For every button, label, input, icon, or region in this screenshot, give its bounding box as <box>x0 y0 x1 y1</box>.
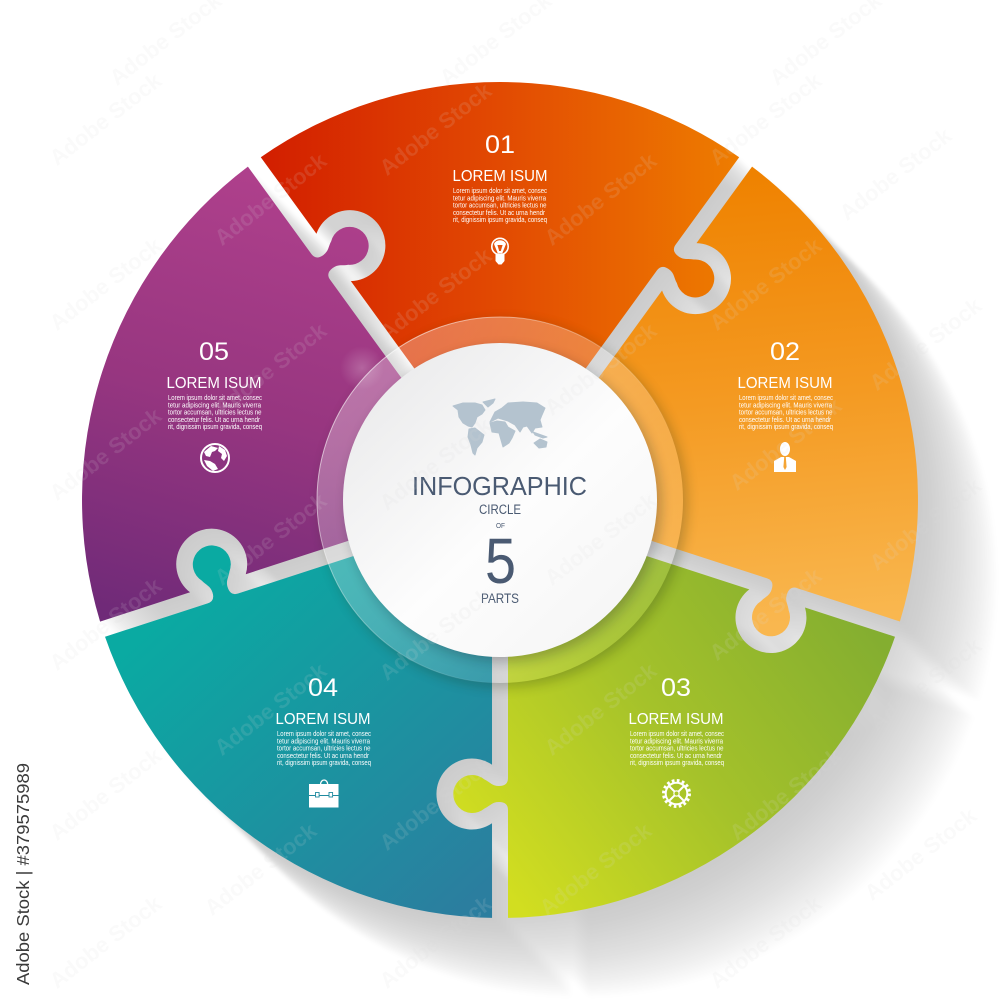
section 04 text <box>276 674 371 767</box>
section 05 text: LOREM ISUM <box>166 375 262 392</box>
section 05 text: 05 <box>199 338 229 366</box>
watermark: Adobe Stock <box>210 657 332 760</box>
section 04 text: tortor accumsan, ultricies lectus ne <box>277 744 370 753</box>
puzzle piece 04 teal <box>105 539 492 918</box>
centre subtitle circle: CIRCLE <box>479 502 521 517</box>
watermark: Adobe Stock <box>725 392 847 495</box>
watermark: Adobe Stock <box>210 147 332 250</box>
watermark: Adobe Stock <box>375 752 497 855</box>
section 01 text: tortor accumsan, ultricies lectus ne <box>453 201 546 210</box>
watermark: Adobe Stock <box>45 572 167 675</box>
section 01 text <box>452 131 548 224</box>
watermark: Adobe Stock <box>540 147 662 250</box>
watermark: Adobe Stock <box>210 487 332 590</box>
watermark: Adobe Stock <box>865 292 987 395</box>
section 01 text: 01 <box>485 131 515 159</box>
watermark: Adobe Stock <box>540 317 662 420</box>
section 03 text: rit, dignissim ipsum gravida, conseq <box>630 758 724 767</box>
centre number 5: 5 <box>485 525 516 597</box>
section 03 text: 03 <box>661 674 691 702</box>
watermark: Adobe Stock <box>45 67 167 170</box>
watermark: Adobe Stock <box>725 742 847 845</box>
watermark: Adobe Stock <box>860 802 982 905</box>
section 03 text: tortor accumsan, ultricies lectus ne <box>630 744 724 753</box>
section 02 text: LOREM ISUM <box>738 375 832 392</box>
watermark: Adobe Stock <box>705 232 827 335</box>
section 02 text: rit, dignissim ipsum gravida, conseq <box>739 422 833 431</box>
stock id vertical text: Adobe Stock | #379575989 <box>13 763 33 985</box>
puzzle piece 02 orange <box>565 167 918 636</box>
watermark: Adobe Stock <box>865 632 987 735</box>
section 05 text <box>166 338 262 431</box>
watermark: Adobe Stock <box>375 412 497 515</box>
section 03 text <box>628 674 724 767</box>
watermark: Adobe Stock <box>535 817 657 920</box>
glass ring shadow <box>321 321 687 687</box>
section 02 text: tortor accumsan, ultricies lectus ne <box>739 408 832 417</box>
puzzle piece 03 green <box>453 538 895 918</box>
watermark: Adobe Stock <box>45 742 167 845</box>
watermark: Adobe Stock <box>210 317 332 420</box>
watermark: Adobe Stock <box>835 122 957 225</box>
section 05 text: Lorem ipsum dolor sit amet, consec <box>168 393 262 402</box>
watermark: Adobe Stock <box>705 67 827 170</box>
centre circle shadow <box>347 348 661 662</box>
section 01 text: Lorem ipsum dolor sit amet, consec <box>453 186 547 195</box>
section 02 text: 02 <box>770 338 800 366</box>
centre of: OF <box>496 523 505 530</box>
section 03 text: tetur adipiscing elit. Mauris viverra <box>630 736 723 745</box>
section 01 text: consectetur felis. Ut ac urna hendr <box>453 208 546 217</box>
section 02 text: Lorem ipsum dolor sit amet, consec <box>739 393 833 402</box>
section 01 text: tetur adipiscing elit. Mauris viverra <box>453 193 546 202</box>
centre title: INFOGRAPHIC <box>412 471 587 501</box>
puzzle piece 05 purple <box>82 167 435 622</box>
section 04 text: tetur adipiscing elit. Mauris viverra <box>277 736 370 745</box>
section 04 text: consectetur felis. Ut ac urna hendr <box>277 751 370 760</box>
section 05 text: consectetur felis. Ut ac urna hendr <box>168 415 261 424</box>
watermark: Adobe Stock <box>45 232 167 335</box>
section 01 text: LOREM ISUM <box>452 168 548 185</box>
section 02 text <box>738 338 833 431</box>
section 04 text: 04 <box>308 674 338 702</box>
watermark: Adobe Stock <box>375 582 497 685</box>
section 04 text: Lorem ipsum dolor sit amet, consec <box>277 729 371 738</box>
watermark: Adobe Stock <box>375 890 497 993</box>
centre circle <box>343 343 657 657</box>
section 03 text: LOREM ISUM <box>628 711 724 728</box>
icon: globe <box>201 444 229 472</box>
section 02 text: consectetur felis. Ut ac urna hendr <box>739 415 832 424</box>
icon: businessman <box>774 442 796 472</box>
section 05 text: tortor accumsan, ultricies lectus ne <box>168 408 262 417</box>
ring sparkle <box>340 346 384 390</box>
watermark: Adobe Stock <box>865 472 987 575</box>
watermark: Adobe Stock <box>375 77 497 180</box>
section 04 text: rit, dignissim ipsum gravida, conseq <box>277 758 371 767</box>
section 02 text: tetur adipiscing elit. Mauris viverra <box>739 400 832 409</box>
section 04 text: LOREM ISUM <box>276 711 370 728</box>
section 05 text: rit, dignissim ipsum gravida, conseq <box>168 422 262 431</box>
watermark: Adobe Stock <box>705 890 827 993</box>
puzzle piece 01 red <box>261 82 739 414</box>
centre parts: PARTS <box>481 591 519 606</box>
watermark: Adobe Stock <box>45 402 167 505</box>
watermark: Adobe Stock <box>705 562 827 665</box>
watermark: Adobe Stock <box>540 487 662 590</box>
watermark: Adobe Stock <box>45 890 167 993</box>
ring highlight <box>317 317 683 683</box>
watermark: Adobe Stock <box>200 817 322 920</box>
watermark: Adobe Stock <box>375 242 497 345</box>
long shadow <box>108 160 989 989</box>
icon: briefcase <box>309 780 338 808</box>
section 03 text: Lorem ipsum dolor sit amet, consec <box>630 729 724 738</box>
section 03 text: consectetur felis. Ut ac urna hendr <box>630 751 723 760</box>
icon: light bulb <box>491 238 509 264</box>
world map <box>453 399 547 455</box>
icon: gear <box>664 780 690 806</box>
glass ring <box>317 317 683 683</box>
section 01 text: rit, dignissim ipsum gravida, conseq <box>453 215 547 224</box>
section 05 text: tetur adipiscing elit. Mauris viverra <box>168 400 261 409</box>
watermark: Adobe Stock <box>540 657 662 760</box>
